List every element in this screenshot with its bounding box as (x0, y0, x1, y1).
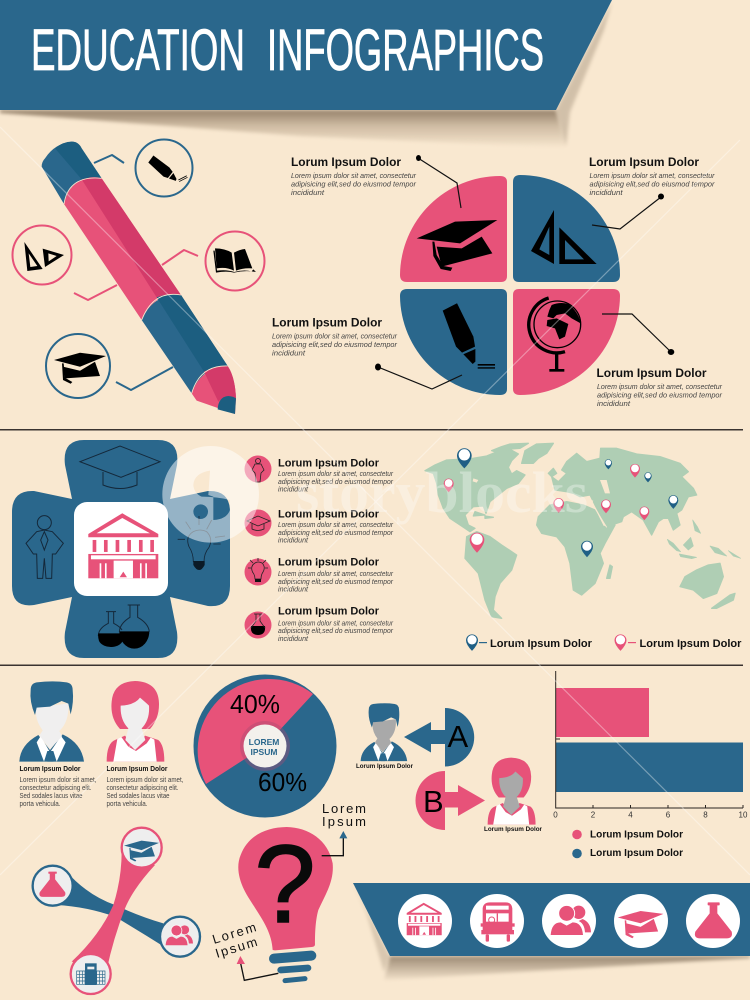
bar chart: 4 (628, 810, 633, 820)
bar chart: 8 (703, 810, 708, 820)
arrow B (416, 771, 485, 830)
quadrant: set squares (513, 175, 620, 282)
avatar: man (19, 681, 84, 762)
circle: flask (33, 866, 73, 906)
arrow A (404, 708, 474, 766)
icon: flask (686, 894, 740, 948)
clover shape (12, 440, 230, 658)
arrow B: B (423, 784, 444, 819)
icon: building (398, 894, 452, 948)
label: top (322, 801, 366, 829)
icon: cap (614, 894, 668, 948)
quadrant: globe (513, 289, 620, 395)
title: EDUCATION (31, 18, 245, 83)
profile text: woman (106, 764, 184, 808)
profile text: man: Sed sodales lacus vitae (20, 791, 82, 800)
profile text: woman: Sed sodales lacus vitae (106, 791, 170, 800)
leader dots (375, 155, 674, 370)
profile text: man (20, 764, 96, 808)
label: top: Ipsum (322, 814, 366, 829)
list item 3: incididunt (278, 584, 309, 594)
list item 3: Lorum Ipsum Dolor (278, 556, 380, 568)
text block: bottom left: incididunt (272, 348, 306, 358)
text block: top left: Lorum Ipsum Dolor (291, 155, 401, 169)
icon: graduation cap (46, 334, 110, 398)
label: top: Lorem (322, 801, 366, 816)
icon: lightbulb outline (178, 516, 225, 570)
circle: graduation cap (122, 828, 162, 868)
bar chart (553, 671, 748, 859)
map legend (466, 634, 742, 651)
list item 4: Lorem ipsum dolor sit amet, consectetur (278, 618, 393, 628)
arrow A: A (448, 719, 468, 754)
icon: person outline (26, 516, 63, 578)
map legend: Lorum Ipsum Dolor (490, 638, 593, 650)
text block: bottom left: adipisicing elit,sed do eiusmod tempor (272, 340, 397, 349)
connectors (74, 155, 198, 390)
center tile (74, 502, 168, 596)
title: INFOGRAPHICS (267, 18, 544, 83)
panel: bottom banner (353, 883, 750, 980)
panel: pencil with icons (12, 140, 264, 414)
text block: bottom left (272, 316, 397, 358)
panel: cross connector with icons (33, 828, 200, 994)
pie chart: IPSUM (251, 747, 277, 757)
quadrant: marker (400, 289, 507, 395)
list item 2: Lorem ipsum dolor sit amet, consectetur (278, 520, 393, 529)
text block: top left: incididunt (291, 188, 325, 197)
chart legend (572, 828, 683, 859)
icon: book (206, 232, 264, 290)
icon: marker (136, 140, 192, 196)
icon: set squares (12, 226, 72, 284)
list item 4: incididunt (278, 634, 309, 643)
panel: question lightbulb (210, 801, 366, 981)
text block: bottom right: Lorum Ipsum Dolor (596, 366, 707, 380)
text block: top right: Lorem ipsum dolor sit amet, consectetur (590, 171, 715, 180)
text block: bottom right: adipisicing elit,sed do eiusmod tempor (597, 390, 722, 400)
list item 1: adipisicing elit,sed do eiusmod tempor (278, 477, 393, 486)
list item 2 (244, 508, 393, 544)
list item 3: adipisicing elit,sed do eiusmod tempor (278, 577, 393, 586)
profile text: woman: consectetur adipiscing elit. (106, 783, 178, 792)
header banner (0, 0, 612, 148)
list item 3 (244, 556, 393, 594)
icon: cap outline (80, 446, 160, 488)
text block: top right: incididunt (590, 188, 623, 197)
profile text: man: Lorum Ipsum Dolor (20, 764, 81, 773)
panel: quadrant chart (272, 155, 722, 408)
pink strand (72, 852, 155, 970)
text block: top left: adipisicing elit,sed do eiusmod tempor (291, 180, 416, 188)
list item 1: Lorem ipsum dolor sit amet, consectetur (278, 469, 393, 478)
text block: bottom left: Lorum Ipsum Dolor (272, 316, 382, 330)
text block: top right: Lorum Ipsum Dolor (589, 155, 699, 169)
profile text: man: consectetur adipiscing elit. (20, 783, 92, 792)
text block: bottom right (596, 366, 722, 408)
list item 2: adipisicing elit,sed do eiusmod tempor (278, 528, 393, 537)
blue strand (57, 870, 167, 948)
watermark (0, 127, 750, 875)
panel: A and B arrows: Lorum Ipsum Dolor (356, 763, 413, 770)
icon: people (542, 894, 596, 948)
panel: world map (425, 443, 742, 651)
map continents (425, 443, 741, 618)
bulb base (274, 956, 311, 981)
arrow: top (322, 831, 347, 856)
map pins (444, 448, 678, 557)
list item 4: adipisicing elit,sed do eiusmod tempor (278, 626, 393, 635)
bar chart: 10 (739, 810, 748, 820)
label: bottom: Ipsum (213, 934, 259, 961)
list item 3: Lorem ipsum dolor sit amet, consectetur (278, 569, 393, 578)
list item 2: incididunt (278, 536, 309, 544)
pencil (42, 142, 236, 414)
list item 4: Lorum Ipsum Dolor (278, 606, 380, 618)
map legend: Lorum Ipsum Dolor (640, 638, 742, 650)
pie chart: 40% (230, 689, 280, 719)
text block: top right: adipisicing elit,sed do eiusmod tempor (590, 180, 715, 188)
watermark: storyblocks (296, 460, 588, 525)
arrow: bottom (237, 956, 278, 980)
text block: top left (291, 155, 416, 197)
profile text: man: Lorem ipsum dolor sit amet, (20, 775, 96, 784)
chart legend: Lorum Ipsum Dolor (590, 828, 683, 840)
avatar: woman (107, 681, 164, 762)
panel: profiles (19, 681, 183, 808)
profile text: woman: Lorem ipsum dolor sit amet, (106, 775, 184, 784)
question mark: ? (254, 823, 316, 946)
profile text: man: porta vehicula. (20, 799, 60, 808)
title (31, 18, 544, 83)
text block: bottom left: Lorem ipsum dolor sit amet, consectetur (272, 332, 397, 340)
icon: school bus (470, 894, 524, 948)
avatar: small woman (488, 758, 536, 825)
text block: top right (589, 155, 715, 197)
panel: clover with icons (12, 440, 230, 658)
pie chart: LOREM (249, 737, 279, 747)
avatar: small man (361, 703, 407, 761)
list item 2: Lorum Ipsum Dolor (278, 508, 380, 520)
list item 1 (244, 456, 393, 494)
bulb (238, 827, 333, 950)
pie chart: 60% (258, 767, 307, 797)
text block: bottom right: incididunt (597, 399, 631, 408)
panel: A and B arrows: Lorum Ipsum Dolor (484, 826, 542, 833)
text block: bottom right: Lorem ipsum dolor sit amet, consectetur (597, 382, 722, 391)
panel: A and B arrows (356, 703, 542, 833)
bar chart: 6 (666, 810, 671, 820)
bar chart: 2 (591, 810, 596, 820)
chart legend: Lorum Ipsum Dolor (590, 847, 683, 859)
profile text: woman: porta vehicula. (106, 799, 148, 808)
list item 1: incididunt (278, 484, 309, 494)
pie chart (194, 674, 336, 818)
quadrant: graduation cap (400, 176, 507, 282)
profile text: woman: Lorum Ipsum Dolor (106, 764, 168, 773)
circle: office building (71, 954, 111, 994)
bar chart: 0 (553, 810, 558, 820)
icon: building (88, 513, 158, 578)
leader lines (378, 158, 671, 389)
panel: icon list (244, 456, 393, 643)
icon: flasks (98, 605, 149, 649)
label: bottom (210, 919, 259, 961)
list item 1: Lorum Ipsum Dolor (278, 458, 380, 470)
text block: top left: Lorem ipsum dolor sit amet, consectetur (291, 171, 416, 180)
circle: people (160, 917, 200, 957)
label: bottom: Lorem (210, 919, 258, 947)
list item 4 (244, 606, 393, 643)
